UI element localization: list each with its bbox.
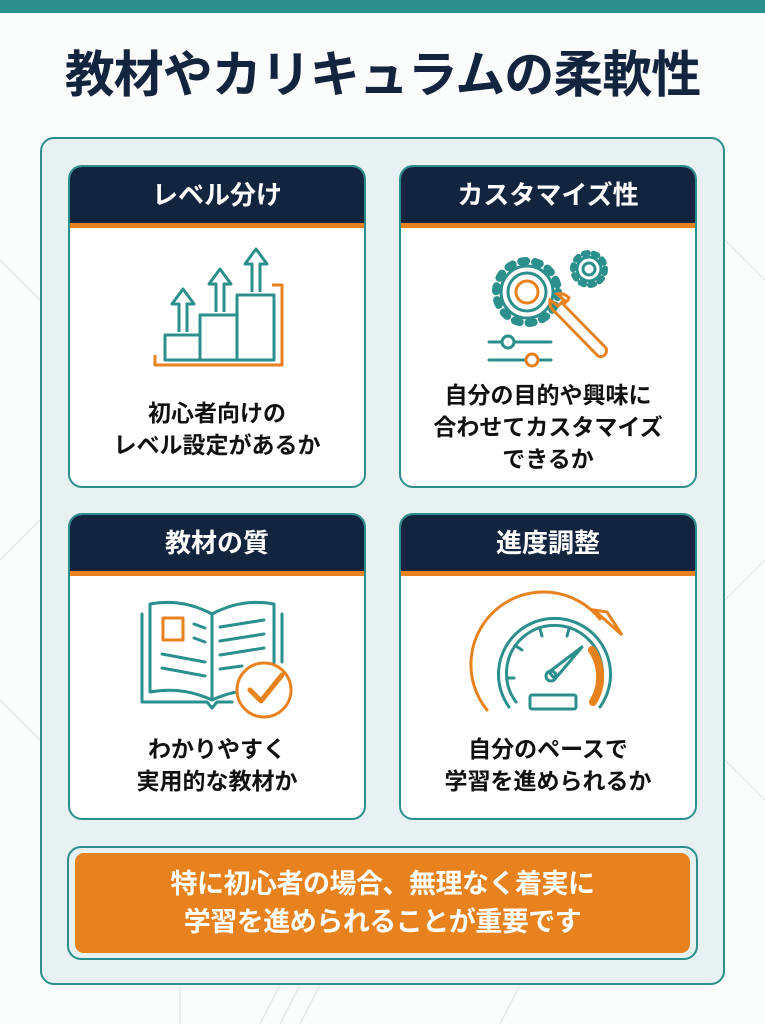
title: 教材やカリキュラムの柔軟性 — [65, 47, 700, 103]
header: カスタマイズ性 — [457, 180, 639, 210]
icon: stairs with arrows — [154, 247, 284, 366]
callout — [67, 846, 698, 960]
icon: book check — [140, 600, 292, 718]
text: できるか — [502, 446, 594, 472]
header: 進度調整 — [496, 528, 600, 558]
header: レベル分け — [152, 180, 282, 210]
icon: gears wrench — [488, 250, 608, 368]
header — [401, 167, 695, 228]
text: 自分のペースで — [468, 736, 628, 762]
text: 学習を進められるか — [444, 768, 652, 794]
icon: speedometer — [469, 590, 624, 712]
header — [70, 515, 364, 576]
header — [70, 167, 364, 228]
callout text — [75, 853, 690, 953]
callout text: 特に初心者の場合、無理なく着実に — [170, 869, 594, 899]
text — [433, 382, 663, 472]
card: customize — [399, 165, 697, 488]
text: レベル設定があるか — [114, 432, 320, 458]
text: 自分の目的や興味に — [444, 382, 652, 408]
header: 教材の質 — [165, 528, 269, 558]
text: 実用的な教材か — [136, 768, 298, 794]
card: pace — [399, 513, 697, 820]
text — [136, 736, 298, 794]
card: material quality — [68, 513, 366, 820]
main panel — [40, 137, 725, 985]
card: level — [68, 165, 366, 488]
top bar — [0, 0, 765, 13]
header — [401, 515, 695, 576]
text — [114, 400, 320, 458]
text — [444, 736, 652, 794]
text: 合わせてカスタマイズ — [433, 414, 663, 440]
callout text: 学習を進められることが重要です — [184, 907, 581, 937]
text: 初心者向けの — [148, 400, 286, 426]
text: わかりやすく — [148, 736, 286, 762]
